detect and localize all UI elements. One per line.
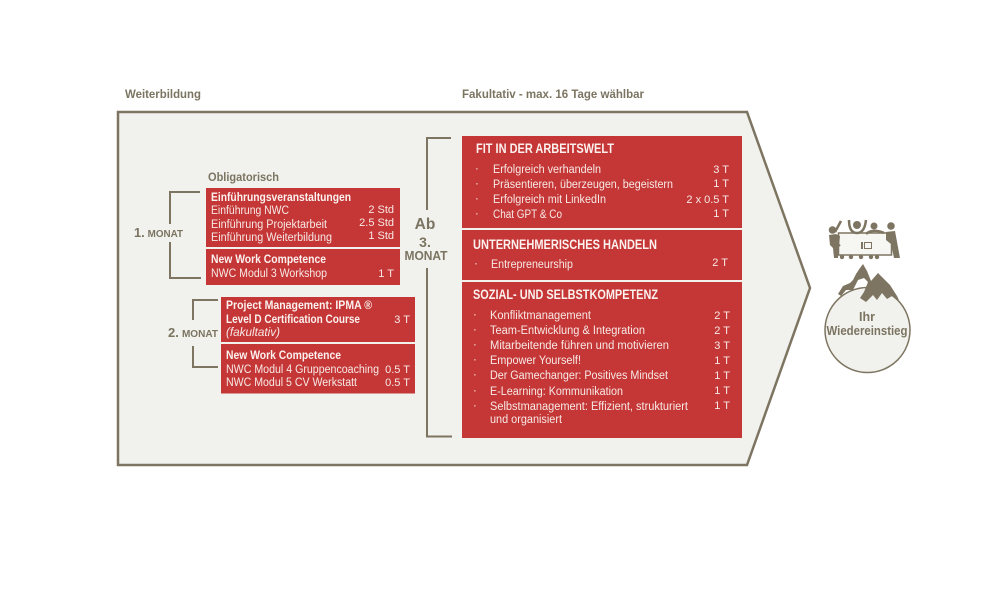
panel: Einführungsveranstaltungen: Einführung NWC — [211, 205, 289, 217]
panel: Sozial- und Selbstkompetenz: · — [473, 400, 477, 412]
panel: New Work Competence month 1: 1 T — [378, 268, 394, 280]
heading: Obligatorisch: Obligatorisch — [208, 170, 279, 184]
panel: Fit in der Arbeitswelt: 1 T — [713, 208, 729, 220]
label: 1. Monat: 1. MONAT — [134, 225, 183, 240]
panel: Unternehmerisches Handeln: · — [474, 258, 478, 270]
bracket: from month 3 — [427, 138, 452, 436]
panel: Einführungsveranstaltungen: 2 Std — [368, 204, 394, 216]
panel: New Work Competence month 2: 0.5 T — [385, 364, 410, 376]
heading: Fakultativ: Fakultativ - max. 16 Tage wählbar — [462, 87, 644, 101]
panel: Sozial- und Selbstkompetenz — [462, 282, 742, 438]
panel: New Work Competence month 2 — [221, 344, 415, 394]
panel: Sozial- und Selbstkompetenz: · — [473, 339, 477, 351]
bracket: month 2 — [193, 300, 218, 367]
panel: New Work Competence month 2: NWC Modul 5 CV Werkstatt — [226, 377, 358, 389]
panel: Sozial- und Selbstkompetenz: · — [473, 354, 477, 366]
panel: Fit in der Arbeitswelt: · — [475, 178, 479, 190]
panel: Fit in der Arbeitswelt: · — [475, 208, 479, 220]
panel: Fit in der Arbeitswelt: Erfolgreich mit LinkedIn — [493, 194, 606, 206]
panel: New Work Competence month 1: New Work Competence — [211, 254, 326, 266]
arrow panel background — [118, 112, 810, 465]
panel: Project Management: 3 T — [394, 314, 410, 326]
panel: Sozial- und Selbstkompetenz: Empower Yourself! — [490, 355, 581, 367]
panel: Sozial- und Selbstkompetenz: Team-Entwicklung & Integration — [490, 325, 645, 337]
panel: Fit in der Arbeitswelt: 1 T — [713, 178, 729, 190]
panel: Sozial- und Selbstkompetenz: und organisiert — [490, 414, 563, 426]
panel: Sozial- und Selbstkompetenz: Konfliktmanagement — [490, 310, 592, 322]
panel: Fit in der Arbeitswelt: Erfolgreich verhandeln — [493, 164, 601, 176]
panel: New Work Competence month 1: NWC Modul 3 Workshop — [211, 268, 327, 280]
panel: Sozial- und Selbstkompetenz: · — [473, 309, 477, 321]
panel: Sozial- und Selbstkompetenz: · — [473, 324, 477, 336]
panel: Sozial- und Selbstkompetenz: 2 T — [714, 310, 730, 322]
panel: New Work Competence month 2: 0.5 T — [385, 377, 410, 389]
panel: Fit in der Arbeitswelt: FIT IN DER ARBEITSWELT — [476, 141, 615, 156]
panel: Einführungsveranstaltungen — [206, 188, 400, 247]
panel: Fit in der Arbeitswelt: · — [475, 163, 479, 175]
panel: Project Management: (fakultativ) — [226, 327, 280, 339]
panel: Fit in der Arbeitswelt: · — [475, 193, 479, 205]
panel: Fit in der Arbeitswelt — [462, 136, 742, 228]
panel: Sozial- und Selbstkompetenz: · — [473, 385, 477, 397]
panel: Sozial- und Selbstkompetenz: Der Gamechanger: Positives Mindset — [490, 370, 669, 382]
label: Ab 3. Monat — [404, 216, 448, 263]
panel: Sozial- und Selbstkompetenz: Mitarbeitende führen und motivieren — [490, 340, 669, 352]
panel: Sozial- und Selbstkompetenz: 1 T — [714, 385, 730, 397]
label: Ab 3. Monat: MONAT — [404, 249, 448, 263]
panel: New Work Competence month 2: NWC Modul 4 Gruppencoaching — [226, 364, 379, 376]
panel: Fit in der Arbeitswelt: Chat GPT & Co — [493, 209, 562, 221]
label: Ihr Wiedereinstieg — [826, 310, 908, 338]
panel: Unternehmerisches Handeln: UNTERNEHMERISCHES HANDELN — [473, 237, 657, 252]
panel: Unternehmerisches Handeln: Entrepreneurship — [491, 259, 573, 271]
panel: Project Management: Project Management: IPMA ® — [226, 300, 372, 312]
panel: Sozial- und Selbstkompetenz: 3 T — [714, 340, 730, 352]
panel: Fit in der Arbeitswelt: Präsentieren, überzeugen, begeistern — [493, 179, 673, 191]
panel: New Work Competence month 1 — [206, 249, 400, 285]
panel: Fit in der Arbeitswelt: 2 x 0.5 T — [686, 194, 729, 206]
panel: Einführungsveranstaltungen: 1 Std — [368, 230, 394, 242]
panel: Einführungsveranstaltungen: Einführung Projektarbeit — [211, 219, 328, 231]
label: Ab 3. Monat: 3. — [419, 234, 431, 250]
label: 2. Monat: 2. MONAT — [168, 325, 218, 340]
panel: Fit in der Arbeitswelt: 3 T — [713, 164, 729, 176]
panel: Einführungsveranstaltungen: Einführung Weiterbildung — [211, 232, 332, 244]
panel: Sozial- und Selbstkompetenz: E-Learning: Kommunikation — [490, 386, 623, 398]
bracket: month 1 — [170, 192, 201, 278]
panel: Einführungsveranstaltungen: Einführungsveranstaltungen — [211, 192, 351, 204]
panel: Sozial- und Selbstkompetenz: Selbstmanagement: Effizient, strukturiert — [490, 401, 689, 413]
label: Ihr Wiedereinstieg: Ihr — [859, 310, 875, 324]
panel: Project Management: Level D Certification Course — [226, 314, 360, 326]
panel: Sozial- und Selbstkompetenz: 1 T — [714, 400, 730, 412]
panel: Unternehmerisches Handeln: 2 T — [712, 257, 728, 269]
label: Ab 3. Monat: Ab — [415, 216, 435, 233]
panel: Sozial- und Selbstkompetenz: 1 T — [714, 355, 730, 367]
heading: Weiterbildung: Weiterbildung — [125, 87, 201, 101]
label: Ihr Wiedereinstieg: Wiedereinstieg — [826, 324, 908, 338]
panel: New Work Competence month 2: New Work Competence — [226, 350, 341, 362]
icon: circle with mountain — [825, 264, 910, 372]
panel: Sozial- und Selbstkompetenz: 1 T — [714, 370, 730, 382]
panel: Sozial- und Selbstkompetenz: · — [473, 369, 477, 381]
panel: Einführungsveranstaltungen: 2.5 Std — [359, 217, 394, 229]
panel: Sozial- und Selbstkompetenz: 2 T — [714, 325, 730, 337]
panel: Sozial- und Selbstkompetenz: SOZIAL- UND SELBSTKOMPETENZ — [473, 287, 658, 302]
icon: people around a table — [829, 220, 900, 259]
panel: Unternehmerisches Handeln — [462, 230, 742, 280]
panel: Project Management — [221, 297, 415, 342]
